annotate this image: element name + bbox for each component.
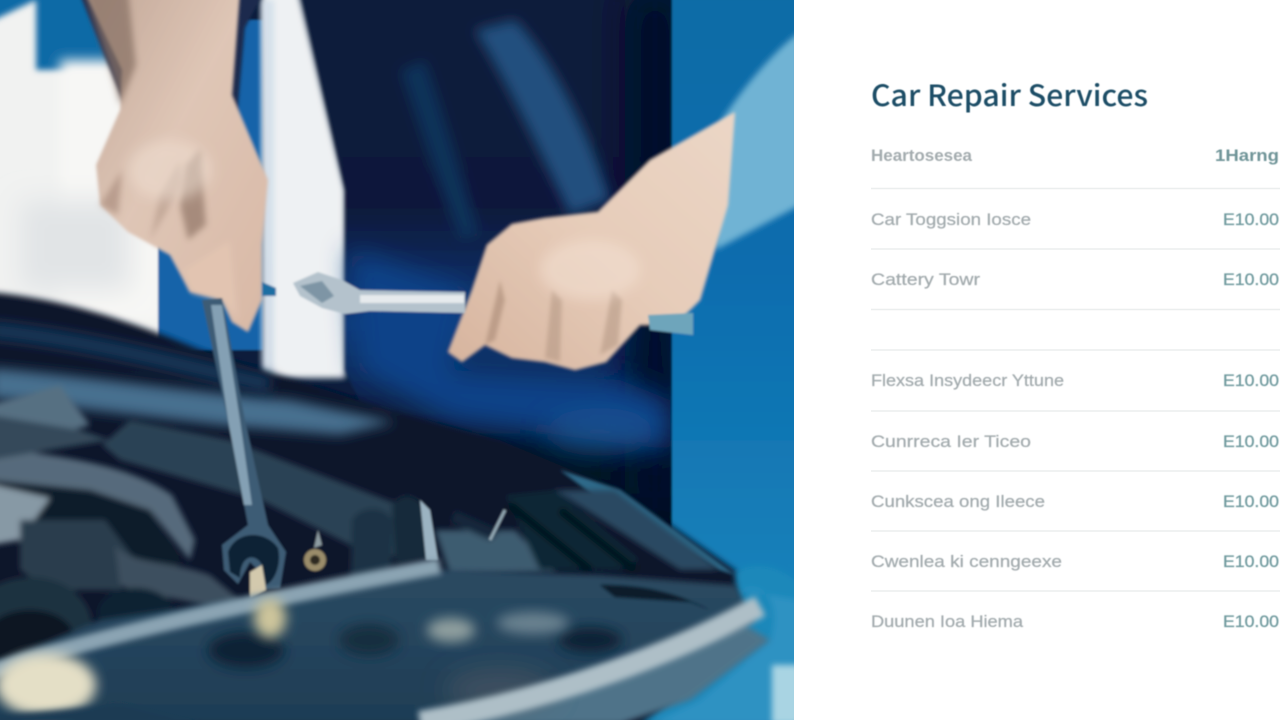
row 7: [871, 612, 1279, 631]
row 4: [871, 432, 1279, 451]
row 7: E10.00: [1223, 612, 1279, 631]
row 3: E10.00: [1223, 371, 1279, 390]
table header row: 1Harng: [1215, 146, 1279, 165]
row 6: [871, 552, 1279, 571]
row 5: Cunkscea ong Ileece: [871, 492, 1045, 511]
table header row: Heartosesea: [871, 146, 973, 165]
row 2: [871, 270, 1279, 289]
row 5: [871, 492, 1279, 511]
panel: service price list: [794, 0, 1280, 720]
row 4: E10.00: [1223, 432, 1279, 451]
photo background: white workshop and blue walls: [0, 0, 652, 720]
engine components: [0, 385, 720, 673]
small engine highlights: [304, 500, 505, 571]
light blue rolled sleeve: [715, 32, 800, 250]
horizontal wrench: [262, 272, 693, 335]
row 3: Flexsa Insydeecr Yttune: [871, 371, 1064, 390]
row 2: Cattery Towr: [871, 270, 980, 289]
table header row: [871, 146, 1279, 165]
row 1: [871, 210, 1279, 229]
panel: workshop photo of mechanic repairing an engine: [0, 0, 800, 720]
heading: Car Repair Services: [871, 73, 1148, 115]
hood underside and dark engine bay: [0, 292, 800, 720]
white list background: [794, 0, 1280, 720]
blurred foreground engine cover: [0, 566, 770, 720]
row 2: E10.00: [1223, 270, 1279, 289]
right hand holding the ratchet: [448, 112, 735, 370]
row 6: Cwenlea ki cenngeexe: [871, 552, 1062, 571]
row 3: [871, 371, 1279, 390]
row 1: Car Toggsion Iosce: [871, 210, 1031, 229]
right blue wall: [672, 0, 800, 600]
left hand gripping the wrench: [84, 0, 268, 332]
row 1: E10.00: [1223, 210, 1279, 229]
row 4: Cunrreca Ier Ticeo: [871, 432, 1031, 451]
dark strap at top of left arm: [80, 0, 262, 111]
mechanic's navy shirt with folds: [300, 0, 685, 530]
row 5: E10.00: [1223, 492, 1279, 511]
row 7: Duunen Ioa Hiema: [871, 612, 1024, 631]
blue car fender: [640, 566, 800, 720]
combination wrench in engine: [202, 298, 286, 598]
row 6: E10.00: [1223, 552, 1279, 571]
